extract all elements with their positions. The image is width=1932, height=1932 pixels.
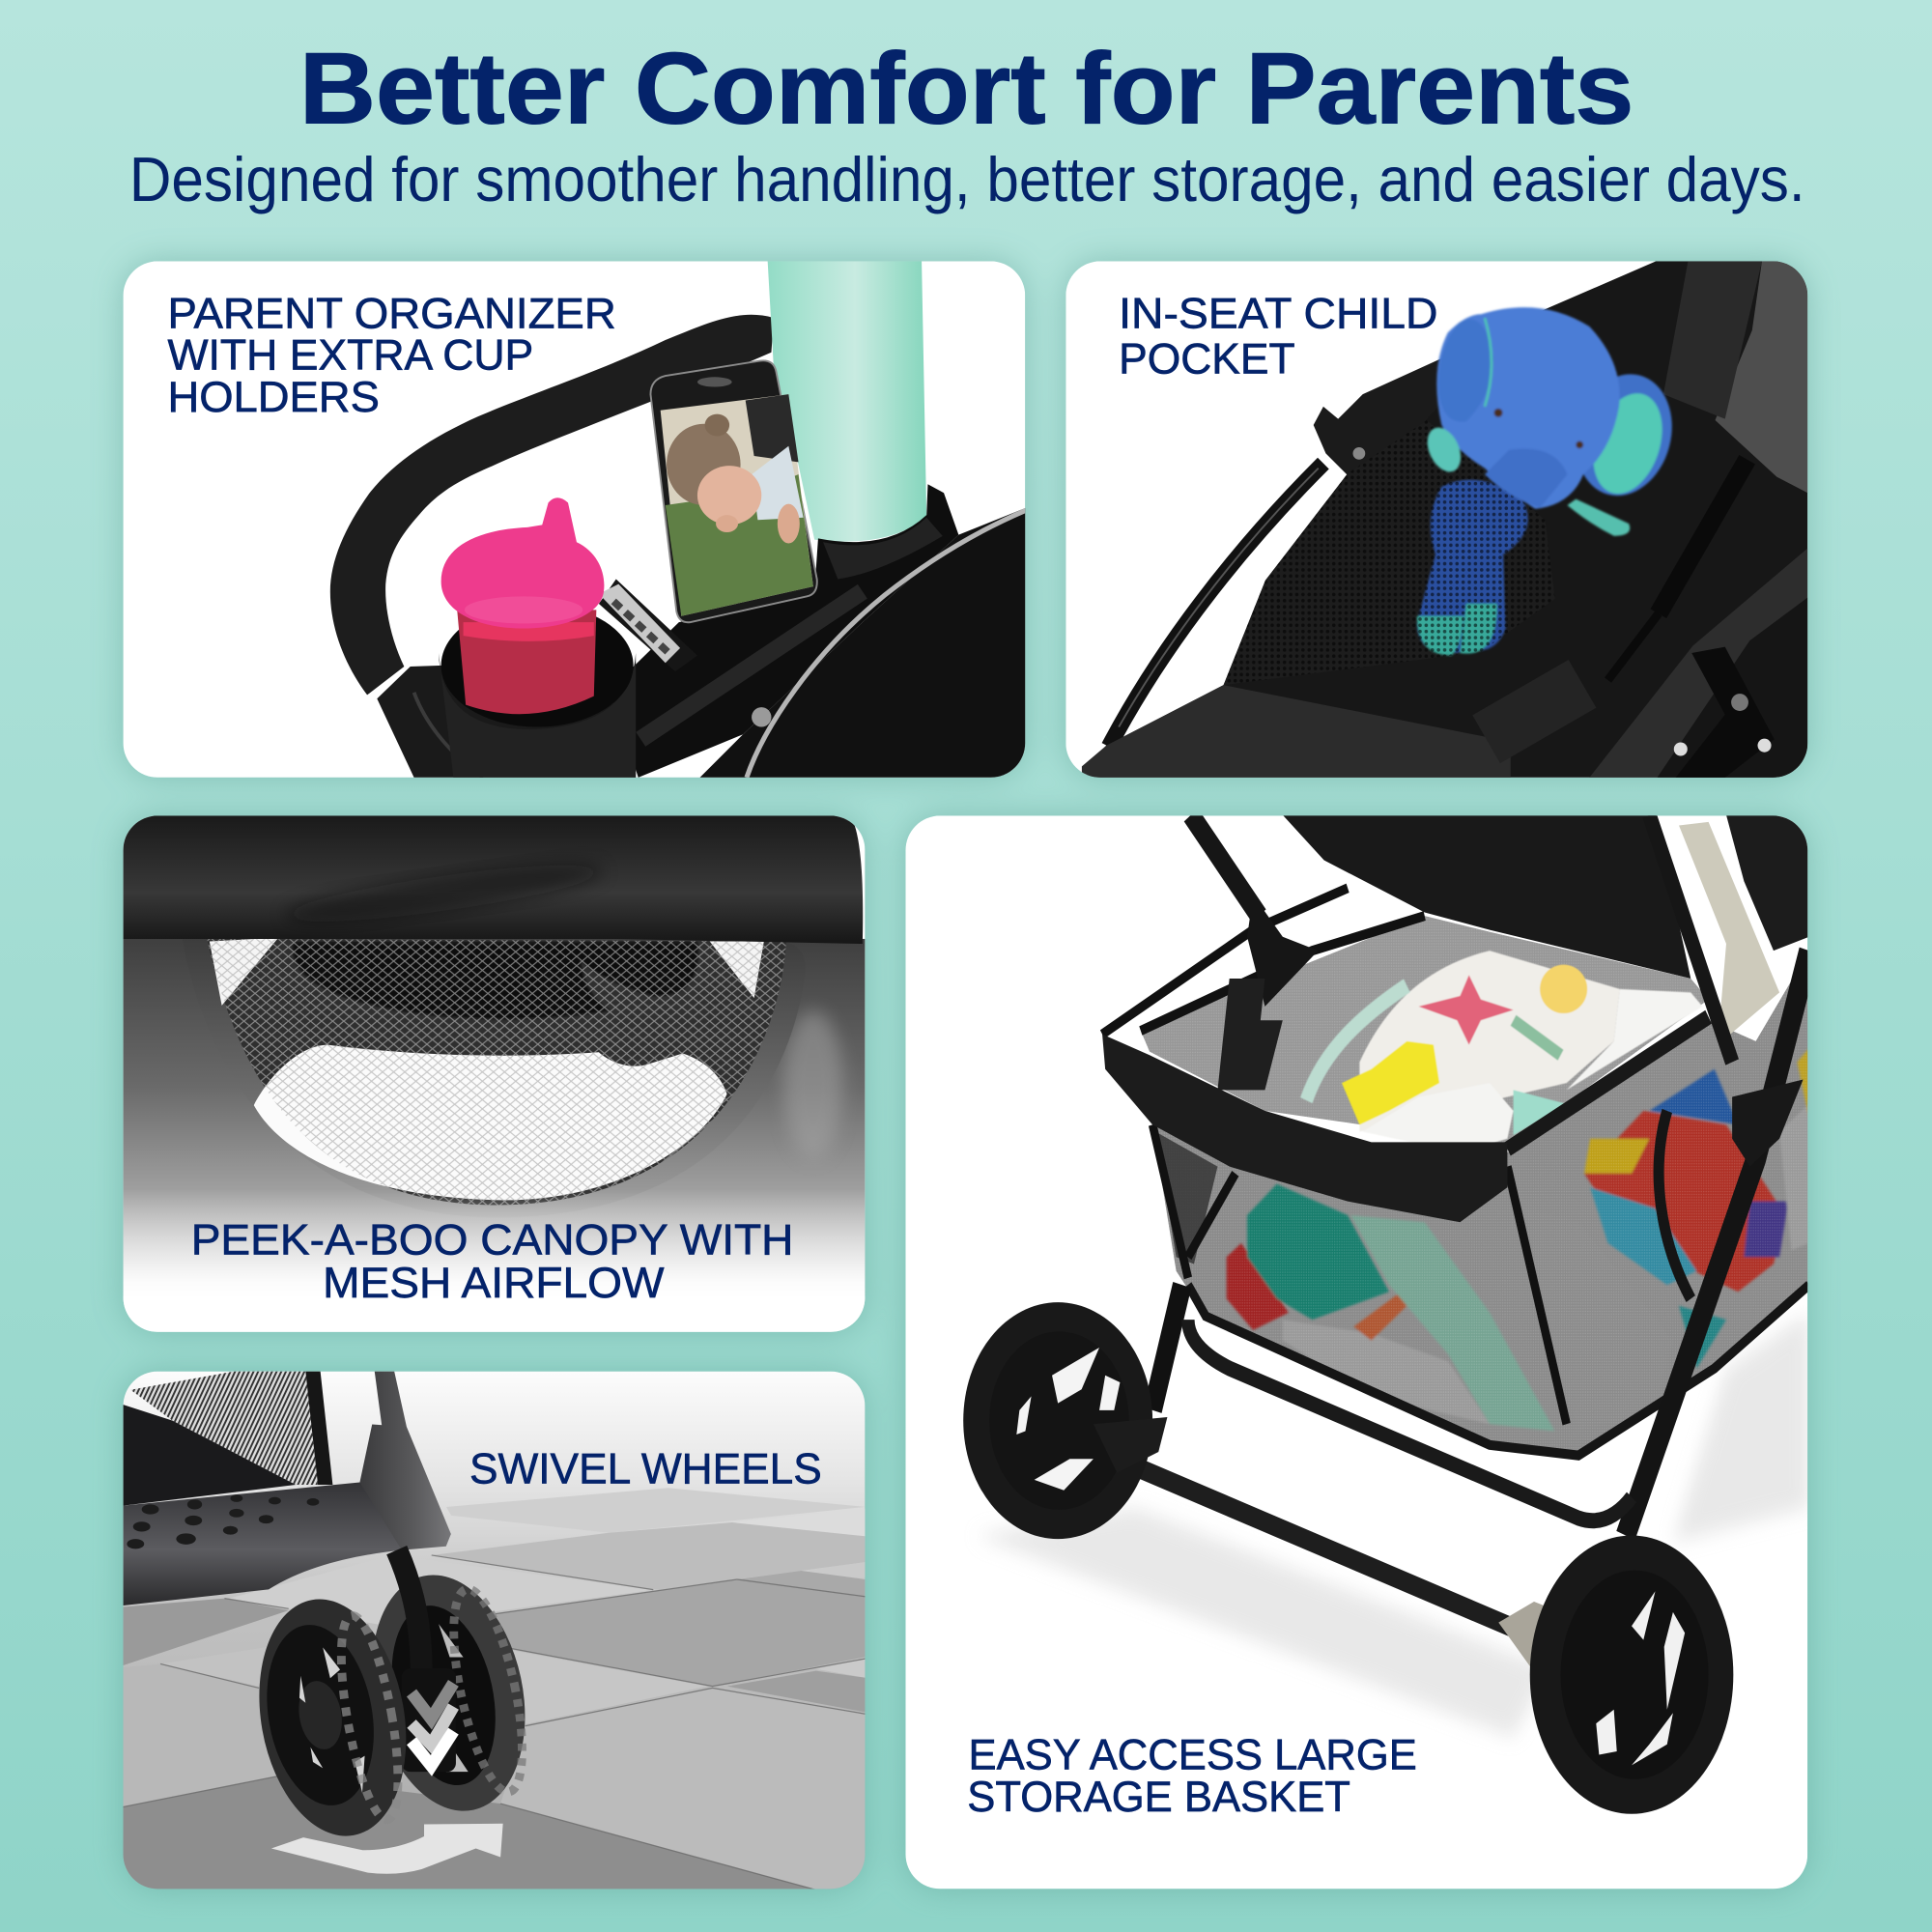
label: POCKET <box>1119 335 1295 383</box>
basket mesh <box>130 1372 318 1485</box>
subtitle: Designed for smoother handling, better storage, and easier days. <box>129 144 1805 214</box>
canopy top <box>124 815 863 944</box>
canopy fabric <box>699 508 1026 778</box>
panel: in-seat pocket <box>1065 261 1807 778</box>
tray base <box>377 666 636 778</box>
axle <box>1117 1459 1525 1633</box>
panel: parent organizer <box>124 261 1026 778</box>
label: PARENT ORGANIZER <box>167 290 616 337</box>
basket rim <box>1102 1035 1507 1222</box>
floor shadows <box>975 1313 1809 1738</box>
piping <box>747 510 1026 778</box>
mesh window rim <box>183 939 806 1217</box>
label: PEEK-A-BOO CANOPY WITH <box>191 1216 793 1264</box>
mesh overlay <box>1152 951 1809 1456</box>
label: IN-SEAT CHILD <box>1119 290 1438 337</box>
sippy cup <box>441 497 604 714</box>
footboard <box>124 1482 451 1605</box>
mesh window interior <box>207 939 786 1205</box>
label <box>1119 290 1438 383</box>
seat underside <box>1283 815 1690 979</box>
label: EASY ACCESS LARGE <box>969 1732 1417 1779</box>
armrest handle <box>1314 359 1441 475</box>
stroller legs <box>1649 815 1732 1062</box>
diapers and toy <box>1306 951 1703 1152</box>
post <box>359 1372 451 1550</box>
basket bottom edge <box>1188 1285 1809 1456</box>
label: STORAGE BASKET <box>967 1774 1350 1821</box>
frame upper <box>1191 815 1259 916</box>
basket contents <box>1227 1048 1809 1431</box>
stroller drawing <box>963 815 1809 1814</box>
side frame <box>1589 549 1807 778</box>
fork <box>397 1550 421 1673</box>
label <box>191 1216 793 1307</box>
title: Better Comfort for Parents <box>299 33 1634 146</box>
water bottle <box>768 261 926 542</box>
chevrons <box>412 1683 453 1766</box>
lower tube <box>1188 1320 1632 1520</box>
frame tube <box>1109 464 1323 747</box>
cup holder <box>439 653 636 778</box>
seat back <box>1082 261 1807 778</box>
canopy side fabric <box>124 939 865 1309</box>
rear wheel <box>352 1561 546 1825</box>
white mesh area <box>254 1045 727 1200</box>
mesh pattern <box>207 939 786 1205</box>
mesh pocket <box>1223 474 1347 685</box>
dark opening <box>293 943 697 1019</box>
label <box>967 1732 1417 1821</box>
elephant body <box>1417 480 1528 656</box>
swivel arrow <box>271 1824 503 1874</box>
paving tiles <box>123 1488 866 1889</box>
panel: peek-a-boo canopy <box>124 815 865 1332</box>
seat bottom <box>1082 685 1511 778</box>
white fade <box>124 1189 865 1300</box>
front wheel <box>242 1587 424 1848</box>
label: WITH EXTRA CUP <box>167 332 533 380</box>
white corners <box>210 938 764 1006</box>
key fob <box>599 580 680 663</box>
grey latch <box>1679 822 1779 1037</box>
grey flap <box>1716 261 1807 493</box>
harness strap <box>1659 460 1747 613</box>
label <box>167 298 614 412</box>
front wheel <box>963 1302 1167 1539</box>
handlebar <box>330 315 774 695</box>
footboard studs <box>127 1494 319 1548</box>
mesh overlay <box>1224 420 1555 685</box>
lower basket <box>1152 951 1809 1456</box>
bottle holder and tray arm <box>622 484 958 778</box>
rear wheel <box>1530 1536 1733 1814</box>
elephant <box>1421 307 1685 536</box>
panel: storage basket <box>906 815 1809 1889</box>
label: SWIVEL WHEELS <box>469 1446 822 1493</box>
label: HOLDERS <box>167 374 380 421</box>
phone <box>650 360 817 622</box>
upper basket mesh <box>1141 916 1709 1146</box>
label: MESH AIRFLOW <box>323 1260 664 1307</box>
panel: swivel wheels <box>123 1372 866 1889</box>
